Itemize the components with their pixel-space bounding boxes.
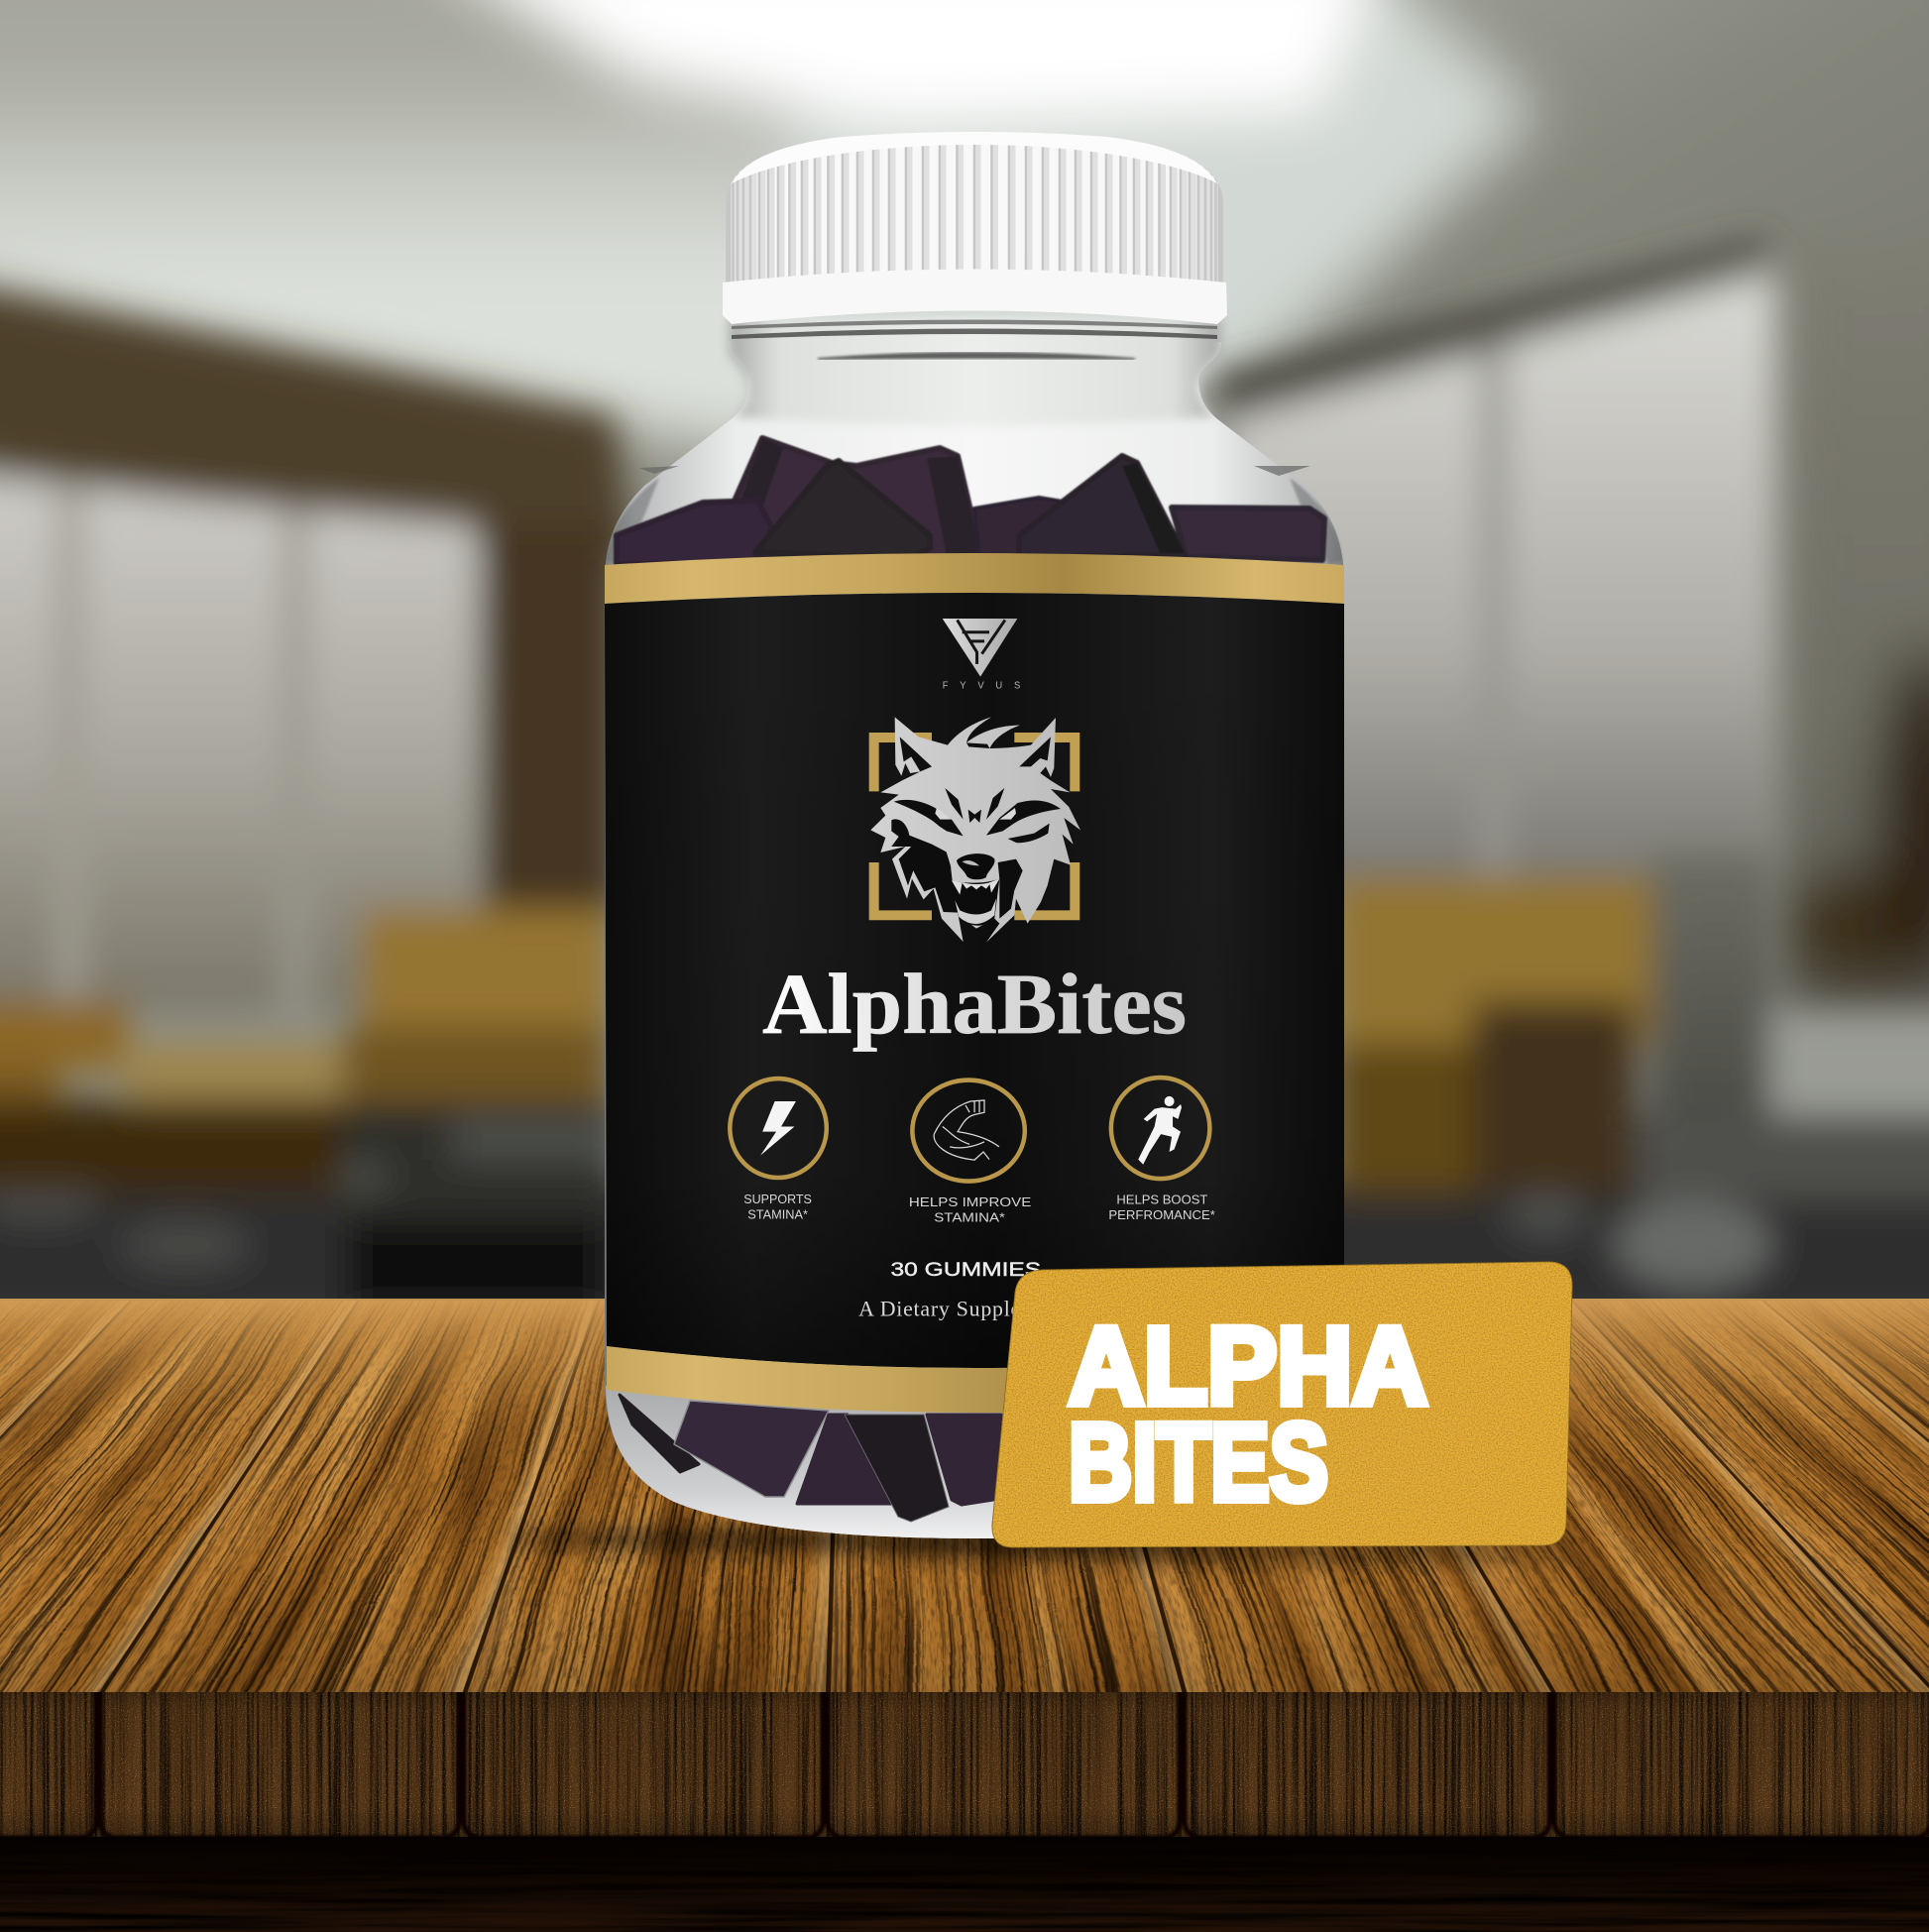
wolf head — [870, 717, 1080, 943]
table front edge — [0, 1692, 1929, 1837]
gold corner brackets — [874, 738, 1075, 915]
label black panel — [605, 593, 1344, 1368]
far right brown foliage — [1774, 260, 1929, 1043]
product bottle — [605, 132, 1572, 1548]
left window — [0, 476, 476, 1011]
column — [484, 525, 618, 917]
FYVUS logo: FYVUS — [943, 680, 1020, 691]
right beam — [1214, 238, 1766, 421]
benefit captions: STAMINA* — [747, 1207, 808, 1221]
card text — [1069, 1306, 1427, 1524]
gummies in top of jar — [617, 438, 1324, 564]
gold label card — [981, 1254, 1586, 1556]
centre ceiling — [793, 0, 1532, 436]
dietary supplement text: A Dietary Supplement — [858, 1297, 1068, 1321]
icon: energy bolt — [730, 1079, 827, 1178]
card text: ALPHA — [1069, 1306, 1427, 1427]
label upper gold band — [605, 553, 1344, 604]
benefit captions: STAMINA* — [934, 1210, 1005, 1224]
icon: runner — [1111, 1078, 1209, 1179]
left ceiling — [0, 0, 813, 287]
left sofas — [0, 1001, 129, 1071]
right window — [1229, 273, 1774, 892]
benefit captions — [743, 1193, 1215, 1224]
right sofas — [1333, 876, 1652, 1043]
FYVUS logo — [943, 619, 1020, 691]
wood table top — [0, 1301, 1929, 1692]
table shading, front edge and floor band — [0, 1299, 1929, 1932]
glass jar body — [605, 317, 1344, 1538]
benefit captions: SUPPORTS — [743, 1193, 812, 1206]
AlphaBites title: AlphaBites — [762, 957, 1187, 1052]
floor — [0, 1185, 1929, 1333]
white ceiling glow — [426, 0, 1388, 124]
wolf emblem with gold brackets — [870, 717, 1080, 943]
benefit captions: HELPS IMPROVE — [909, 1195, 1031, 1209]
label lower gold band — [607, 1346, 1344, 1413]
30 gummies text: 30 GUMMIES — [891, 1260, 1041, 1281]
bottle shadow on table — [506, 1527, 1576, 1564]
glass base below label — [606, 1386, 1344, 1538]
card text: BITES — [1069, 1402, 1328, 1524]
white ribbed cap — [723, 129, 1227, 324]
label artwork — [730, 619, 1215, 1321]
icon: flexed arm — [912, 1080, 1025, 1182]
left beam — [0, 282, 634, 555]
benefit captions: PERFROMANCE* — [1108, 1208, 1215, 1222]
dark floor band — [0, 1837, 1929, 1932]
right ceiling — [1229, 0, 1929, 406]
benefit captions: HELPS BOOST — [1116, 1193, 1208, 1207]
right couch — [1770, 1011, 1929, 1115]
